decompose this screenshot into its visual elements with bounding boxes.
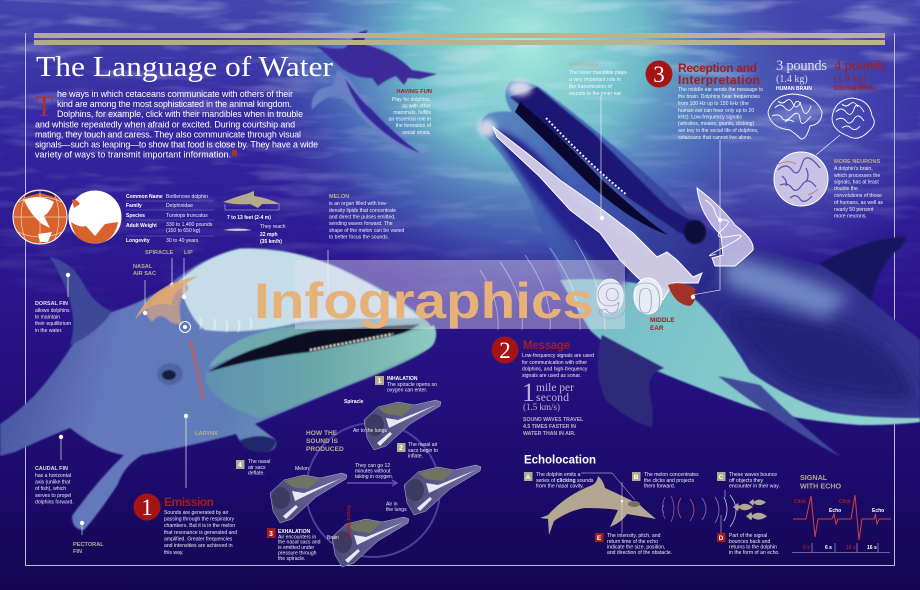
dorsal fin note: their equilibrium [35,321,71,327]
step A [524,472,594,490]
step 4 [236,459,270,476]
step A: A [526,474,531,481]
step 2: inflate. [408,454,423,460]
mandible note: the transmission of [569,84,612,90]
speed note: WATER THAN IN AIR. [523,431,576,437]
reception heading: Interpretation [678,73,760,87]
echolocation [524,454,780,556]
left dolphin: ribs [200,318,252,332]
more neurons text: convolutions of those [834,193,882,199]
more neurons text [834,159,883,220]
emission text: chambers. But it is in the melon [164,523,235,529]
cycle notes: They can go 12 [355,463,390,469]
step D: D [719,535,724,542]
right dolphin: snout highlights [478,80,532,137]
step C [717,472,780,490]
anatomy labels: AIR SAC [133,271,156,277]
left dolphin: mouth [208,324,420,372]
melon note: is an organ filled with low- [329,201,388,207]
step 2: 2 [399,445,403,452]
intro text: Dolphins, for example, click with their mandibles when in trouble [57,109,303,119]
signal with echo chart [792,473,891,552]
speed note: SOUND WAVES TRAVEL [523,417,584,423]
caudal fin note: axis (unlike that [35,480,71,486]
reception text: human ear can hear only up to 20 [678,108,754,114]
step B: them forward. [644,484,675,490]
having fun note: social strata. [402,130,431,136]
step 2: sacs begin to [408,448,438,454]
reception text: are key in the social life of dolphins, [678,128,758,134]
drop cap: T [35,90,53,123]
chart labels: 6 s [825,545,832,551]
step B: The melon concentrates [644,472,699,478]
left dolphin: lower jaw [205,325,436,418]
anatomy labels: NASAL [133,264,153,270]
sound wave arcs [662,495,736,527]
step 4: The nasal [248,459,270,465]
dolphin brain weight: DOLPHIN BRAIN [834,86,874,92]
step C: off objects they [729,478,764,484]
middle ear label: MIDDLE [650,317,675,324]
chart labels: 16 s [867,545,877,551]
melon note: density lipids that concentrate [329,208,396,214]
step 1 inhalation: INHALATION [387,376,418,382]
step D: returns to the dolphin [729,544,777,550]
dolphin size silhouette: 7 to 13 feet (2-4 m) [227,215,271,221]
intro text [35,89,318,160]
cycle notes [295,399,407,541]
watermark: 90 [596,273,662,329]
swim speed: 22 mph [260,232,278,238]
reception heading [678,61,760,87]
having fun note: the formation of [396,123,432,129]
chart labels: Echo [872,508,884,514]
dorsal fin note: to maintain [35,314,60,320]
step B: the clicks and projects [644,478,695,484]
chart labels: 0 s [803,545,810,551]
title: The Language of Water [36,51,333,83]
dolphin brain weight [834,58,886,92]
left dolphin: fin shadow [240,436,276,452]
step 4: 4 [238,462,242,469]
step 1: emission [134,494,237,556]
swim speed: They reach [260,224,286,230]
emission text: passing through the respiratory [164,516,235,522]
mandible note: The lower mandible plays [569,70,627,76]
species table: Species [126,213,145,219]
reception text: The middle ear sends the message to [678,87,763,93]
chart heading [800,473,842,490]
time axis [792,543,890,552]
species table: Tursiops truncatus [166,213,208,219]
message text: dolphins, and high-frequency [522,366,588,372]
swim speed [223,224,286,245]
dorsal fin note [35,301,71,334]
step E [595,533,672,556]
melon note: and direct the pulses emitted, [329,214,396,220]
globe: Asia [69,191,121,243]
watermark: Infographics [254,273,594,329]
head diagrams [270,400,481,567]
watermark [135,240,662,330]
step E: E [597,535,602,542]
cycle notes: Air to the lungs [353,428,387,434]
having fun note: as with other [402,104,431,110]
anatomy labels: SPIRACLE [145,250,174,256]
cycle heading: HOW THE [306,430,338,437]
dolphin size silhouette [223,191,280,221]
right dolphin: pectoral fin right [718,376,841,457]
more neurons text: A dolphin's brain, [834,166,873,172]
speed figure: second [536,392,569,404]
step 1 inhalation: oxygen can enter. [387,388,427,394]
species table: 30 to 40 years [166,238,199,244]
step 3 exhalation: is emitted under [278,545,315,551]
step B [632,472,699,490]
cycle notes: Air in [386,502,398,508]
species table: Family [126,203,142,209]
anatomy labels [73,250,218,555]
reception text [678,87,763,141]
intro text: and whistle repeatedly when afraid or excited. During courtship and [35,120,295,130]
middle ear [668,283,695,306]
message text: for communication with other [522,360,587,366]
caudal fin note [35,466,74,506]
right dolphin: dorsal fin [820,236,906,300]
having fun note: HAVING FUN [396,89,432,95]
right dolphin: body [481,81,920,425]
chart labels: Click [839,499,851,505]
mandible note: MANDIBLE [569,62,599,68]
step 4: air sacs [248,465,266,471]
reception text: the brain. Dolphins hear frequencies [678,94,760,100]
human brain weight: (1.4 kg) [776,74,808,85]
globe: Americas [13,190,67,244]
number badge 3: 3 [653,62,665,87]
caudal fin note: serves to propel [35,493,71,499]
intro text: he ways in which cetaceans communicate with others of their [57,89,293,99]
emission text: that resonance is generated and [164,530,237,536]
cycle notes: taking in oxygen. [355,474,393,480]
left dolphin: dorsal shading [50,257,112,345]
step D [717,533,780,556]
step D: Part of the signal [729,533,767,539]
small dolphin two [312,70,437,155]
step 3 exhalation: EXHALATION [278,529,311,535]
cycle heading: PRODUCED [306,446,344,453]
step E: return time of the echo [607,539,658,545]
mandible note: a very important role in [569,77,621,83]
step C: encounter in their way. [729,484,780,490]
melon note: MELON [329,194,349,200]
anatomy labels: LIP [184,250,193,256]
ear ovals [597,278,662,314]
chart labels: 10 s [846,545,856,551]
left dolphin: upper jaw [208,321,425,368]
speed figure: mile per [536,382,574,394]
chart heading: SIGNAL [800,473,828,482]
species table: Bottlenose dolphin [166,194,208,200]
reception heading: Reception and [678,61,757,75]
left dolphin: body [0,248,435,530]
step A: series of clicking sounds [536,478,594,484]
chart labels: Echo [829,508,841,514]
swim speed: (35 km/h) [260,239,282,245]
icon: magnified brain tissue [774,152,828,206]
step E: The intensity, pitch, and [607,533,661,539]
anatomy labels: FIN [73,549,82,555]
left dolphin: teeth [310,334,393,350]
left dolphin: melon [178,249,420,331]
right dolphin: dark flank [720,310,915,400]
step 2: The nasal air [408,442,438,448]
number badge 2: 2 [499,338,511,363]
middle ear label [650,317,675,332]
human brain weight [776,58,827,92]
having fun note: an essential role in [389,116,431,122]
reception text: from 100 Hz up to 150 kHz (the [678,101,749,107]
anatomy leader lines [61,95,840,535]
caudal fin note: dolphins forward. [35,500,74,506]
melon note: shape of the melon can be varied [329,228,404,234]
intro text: mating, they touch and caress. They also communicate through visual [35,130,301,140]
right dolphin: eye patch [684,220,706,244]
right dolphin: back highlight [725,255,850,318]
step 3 exhalation: the spiracle. [278,556,305,562]
cycle notes: Melon [295,466,309,472]
caudal fin note: CAUDAL FIN [35,466,68,472]
having fun note [389,89,432,136]
emission text: amplified. Greater frequencies [164,536,233,542]
cycle notes: minutes without [355,468,391,474]
cycle notes: Sound Waves [345,505,351,538]
jaw bone overlay [493,127,702,300]
speed note: 4.5 TIMES FASTER IN [523,424,576,430]
anatomy labels: LARYNX [195,431,218,437]
cycle notes: Brain [327,535,339,541]
message heading: Message [523,340,570,352]
fish [733,499,767,520]
species table: (150 to 650 kg) [166,228,201,234]
step 2: message [492,336,594,437]
step 4: deflate. [248,470,265,476]
step A: from the nasal cavity. [536,484,584,490]
arrow [347,480,397,486]
how the sound is produced [236,376,481,567]
waveform [793,495,891,540]
emission text: this way. [164,550,183,556]
step 1 inhalation [375,376,437,394]
step E: indicate the size, position, [607,544,665,550]
left dolphin: air sacs [145,283,188,325]
step 3 exhalation: pressure through [278,550,317,556]
left dolphin: sound path [190,340,203,400]
right dolphin: teeth [546,118,627,195]
step D: bounces back and [729,539,771,545]
emission text: and intensities are achieved in [164,543,233,549]
species table: Delphinidae [166,203,193,209]
cycle ring [306,423,440,557]
message text: Low-frequency signals are used [522,353,594,359]
step C: C [719,474,724,481]
speed figure: (1.5 km/s) [523,402,560,412]
more neurons text: more neurons. [834,214,867,220]
speed note [523,417,584,437]
caudal fin note: has a horizontal [35,473,71,479]
right dolphin: belly [560,279,920,425]
dorsal fin note: allows dolphins [35,308,70,314]
species table: Adult Weight [126,223,157,229]
step 3: reception [646,60,763,141]
chart labels [794,499,884,551]
icon: dolphin brain [832,98,874,138]
step 3 exhalation: the nasal sacs and [278,540,321,546]
chart heading: WITH ECHO [800,482,842,490]
top bars [34,33,885,45]
mandible note: sounds to the inner ear. [569,91,622,97]
icon: human brain [768,94,822,139]
emission text: Sounds are generated by air [164,510,229,516]
species table [126,194,214,244]
dolphin brain overlay [697,188,753,266]
cycle heading: SOUND IS [306,438,338,445]
middle ear label: EAR [650,325,664,332]
step 1 inhalation: The spiracle opens so [387,382,437,388]
caudal fin note: of fish), which [35,486,66,492]
reception text: kHz). Low-frequency signals [678,114,742,120]
intro text: kind are among the most sophisticated in the animal kingdom. [57,99,292,109]
step 2 [397,442,438,460]
echolocation dolphin [540,473,656,535]
step B: B [634,474,639,481]
right dolphin [478,80,920,457]
species table: Longevity [126,238,150,244]
globes [13,190,121,244]
right dolphin: mouth [515,102,668,235]
cycle heading [306,430,344,453]
reception text: cetaceans that cannot live alone. [678,135,752,141]
dorsal fin note: in the water. [35,328,62,334]
melon note [329,194,404,240]
human brain weight: HUMAN BRAIN [776,86,812,92]
melon note: sending waves forward. The [329,221,393,227]
more neurons text: which processes the [834,173,880,179]
more neurons text: MORE NEURONS [834,159,881,165]
having fun note: Play for dolphins, [392,97,431,103]
number badge 1: 1 [141,495,153,520]
message text: signals are used as sonar. [522,373,581,379]
more neurons text: signals, has at least [834,180,879,186]
right dolphin: upper jaw [510,87,703,240]
small dolphin one [317,30,437,86]
message text [522,353,594,379]
speed figure: 1 [522,378,535,407]
having fun note: mammals, fulfills [393,110,431,116]
step A: The dolphin emits a [536,472,581,478]
dolphin brain weight: 4 pounds [834,58,886,74]
species table: Common Name [126,194,163,200]
intro text: signals—such as leaping—to show that food is close by. They have a wide [35,140,318,150]
anatomy dots [59,216,722,525]
cycle notes: Spiracle [344,399,364,405]
speed figure [522,378,574,412]
step 3 exhalation: 3 [269,531,273,538]
emission text [164,510,237,556]
anatomy labels: PECTORAL [73,542,104,548]
step 3 exhalation: Air encounters in [278,534,316,540]
brain weight comparison [768,58,886,220]
more neurons text: of humans, as well as [834,200,883,206]
reception text: (whistles, moans, grunts, clicking) [678,121,754,127]
chart labels: Click [794,499,806,505]
more neurons text: nearly 50 percent [834,207,874,213]
right dolphin: pectoral fin left [598,335,664,427]
dolphin brain weight: (1.8 kg) [834,74,866,85]
cycle notes: the lungs [386,507,407,513]
species table: 330 to 1,400 pounds [166,222,213,228]
step D: in the form of an echo. [729,550,780,556]
mandible note [569,62,627,97]
intro text: variety of ways to transmit important information. [35,150,231,160]
small dolphins: having fun [312,30,437,155]
step 1 inhalation: 1 [378,378,382,385]
left dolphin: eye [157,363,183,385]
human brain weight: 3 pounds [776,58,827,74]
more neurons text: double the [834,186,858,192]
step C: These waves bounce [729,472,777,478]
step 3 exhalation [267,528,321,562]
left dolphin [0,248,436,530]
step E: and direction of the obstacle. [607,550,672,556]
melon note: to better focus the sounds. [329,234,389,240]
emission heading: Emission [164,495,214,509]
dorsal fin note: DORSAL FIN [35,301,68,307]
echolocation heading: Echolocation [524,454,596,466]
right dolphin: lower jaw shading [492,130,640,290]
